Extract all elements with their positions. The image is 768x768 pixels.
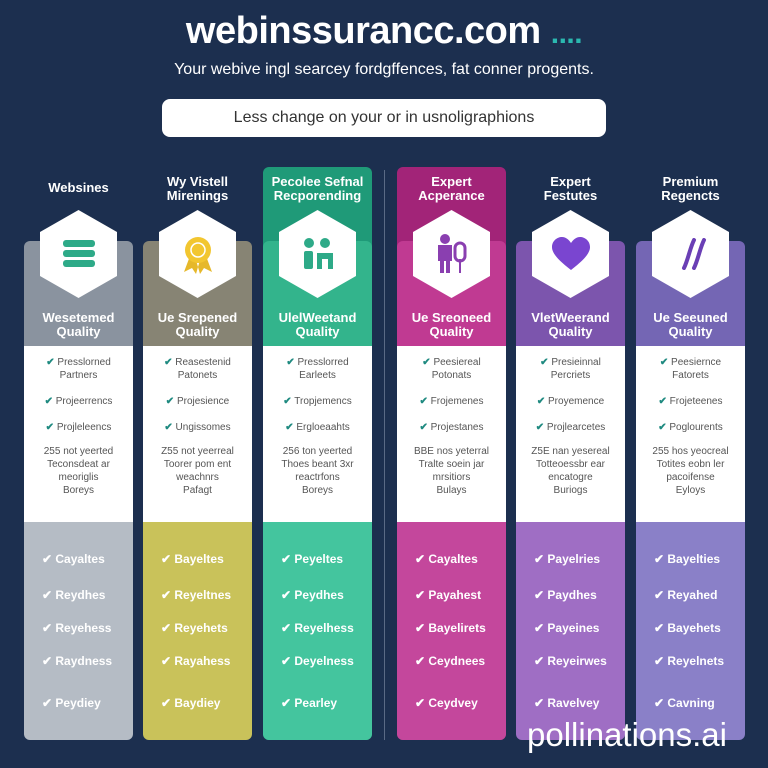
panel: column 6: ✔ Peesiernce: [660, 357, 721, 368]
panel: column 6: ✔ Reyelnets: [654, 654, 724, 668]
panel: column 6: ✔ Bayelties: [654, 552, 720, 566]
subtitle: Your webive ingl searcey fordgffences, fat conner progents.: [174, 61, 594, 78]
panel: column 3: Pecolee Sefnal: [272, 174, 363, 189]
panel: column 5: Z5E nan yesereal: [531, 446, 610, 457]
panel: column 4: Ue Sreoneed: [412, 310, 491, 325]
panel: column 5: encatogre: [548, 472, 593, 483]
panel: column 3: Thoes beant 3xr: [281, 459, 354, 470]
panel: column 4: ✔ Peesiereal: [422, 357, 481, 368]
panel: column 4: ✔ Cayaltes: [415, 552, 478, 566]
icon: person: [413, 210, 490, 298]
panel: column 5: ✔ Paydhes: [534, 588, 597, 602]
panel: column 2: Ue Srepened: [158, 310, 237, 325]
panel: column 4: ✔ Frojemenes: [420, 396, 483, 407]
panel: column 1: ✔ Presslorned: [46, 357, 111, 368]
icon: heart: [532, 210, 609, 298]
panel: column 2: ✔ Reasestenid: [164, 357, 231, 368]
panel: column 5: ✔ Projlearcetes: [536, 422, 605, 433]
icon: award: [159, 210, 236, 298]
panel: column 4: BBE nos yeterral: [414, 446, 489, 457]
panel: column 1: 255 not yeerted: [44, 446, 113, 457]
panel: column 5: [516, 174, 625, 740]
panel: column 6: Quality: [668, 324, 713, 339]
panel: column 5: ✔ Ravelvey: [534, 696, 599, 710]
panel: column 1: Partners: [60, 370, 97, 381]
panel: column 4: Tralte soein jar: [419, 459, 484, 470]
panel: column 6: Premium: [663, 174, 718, 189]
panel: column 5: Buriogs: [554, 485, 587, 496]
panel: column 1: Quality: [56, 324, 101, 339]
panel: column 4: [397, 167, 506, 740]
panel: column 6: ✔ Poglourents: [658, 422, 723, 433]
panel: column 2: [143, 174, 252, 740]
panel: column 4: ✔ Bayelirets: [415, 621, 486, 635]
panel: column 3: Quality: [295, 324, 340, 339]
panel: column 1: ✔ Reydhes: [42, 588, 105, 602]
panel: column 2: ✔ Baydiey: [161, 696, 220, 710]
panel: column 5: ✔ Proyemence: [537, 396, 604, 407]
panel: column 1: ✔ Peydiey: [42, 696, 101, 710]
panel: column 2: ✔ Ungissomes: [164, 422, 231, 433]
panel: column 3: ✔ Peyeltes: [281, 552, 343, 566]
panel: column 4: ✔ Payahest: [415, 588, 481, 602]
panel: column 4: Potonats: [432, 370, 471, 381]
panel: column 5: Quality: [548, 324, 593, 339]
panel: column 2: Quality: [175, 324, 220, 339]
panel: column 6: [636, 174, 745, 740]
panel: column 6: Eyloys: [676, 485, 705, 496]
panel: column 3: Earleets: [299, 370, 336, 381]
panel: column 4: ✔ Projestanes: [420, 422, 483, 433]
panel: column 6: Fatorets: [672, 370, 709, 381]
title: webinssurancc.com ....: [186, 10, 582, 52]
panel: column 2: ✔ Rayahess: [161, 654, 230, 668]
watermark: pollinations.ai: [527, 716, 727, 753]
panel: column 3: ✔ Peydhes: [281, 588, 344, 602]
panel: column 2: Z55 not yeerreal: [161, 446, 234, 457]
panel: column 3: Recporending: [274, 188, 361, 203]
panel: column 6: Ue Seeuned: [653, 310, 728, 325]
panel: column 3: ✔ Deyelness: [281, 654, 354, 668]
panel: column 4: Acperance: [418, 188, 485, 203]
panel: column 5: ✔ Payelries: [534, 552, 600, 566]
search box banner: [162, 99, 606, 137]
divider: [384, 170, 385, 740]
panel: column 2: ✔ Bayeltes: [161, 552, 224, 566]
panel: column 4: ✔ Ceydvey: [415, 696, 478, 710]
panel: column 3: ✔ Reyelhess: [281, 621, 354, 635]
panel: column 2: Wy Vistell: [167, 174, 228, 189]
panel: column 2: ✔ Projesience: [166, 396, 229, 407]
panel: column 6: ✔ Frojeteenes: [658, 396, 722, 407]
panel: column 4: Quality: [429, 324, 474, 339]
panel: column 5: Expert: [550, 174, 591, 189]
panel: column 1: meoriglis: [58, 472, 98, 483]
panel: column 2: ✔ Reyeltnes: [161, 588, 231, 602]
panel: column 5: Percriets: [551, 370, 590, 381]
panel: column 2: Patonets: [178, 370, 217, 381]
panel: column 5: Festutes: [544, 188, 597, 203]
panel: column 4: Expert: [431, 174, 472, 189]
panel: column 6: ✔ Cavning: [654, 696, 715, 710]
panel: column 1: Boreys: [63, 485, 94, 496]
panel: column 2: weachnrs: [176, 472, 219, 483]
panel: column 3: Boreys: [302, 485, 333, 496]
panel: column 6: Totites eobn ler: [657, 459, 724, 470]
icon: people: [279, 210, 356, 298]
panel: column 3: ✔ Tropjemencs: [283, 396, 352, 407]
panel: column 4: mrsitiors: [433, 472, 470, 483]
panel: column 2: ✔ Reyehets: [161, 621, 228, 635]
panel: column 2: Pafagt: [183, 485, 212, 496]
panel: column 6: 255 hos yeocreal: [652, 446, 729, 457]
panel: column 1: Teconsdeat ar: [47, 459, 110, 470]
panel: column 3: ✔ Ergloeaahts: [285, 422, 350, 433]
panel: column 6: Regencts: [661, 188, 720, 203]
panel: column 6: ✔ Bayehets: [654, 621, 721, 635]
panel: column 5: ✔ Payeines: [534, 621, 599, 635]
icon: slashes: [652, 210, 729, 298]
panel: column 1: ✔ Projeerrencs: [45, 396, 112, 407]
panel: column 5: ✔ Presieinnal: [540, 357, 601, 368]
panel: column 3: UlelWeetand: [279, 310, 356, 325]
panel: column 3: ✔ Presslorred: [286, 357, 349, 368]
panel: column 5: VletWeerand: [531, 310, 610, 325]
panel: column 1: ✔ Projleleencs: [46, 422, 111, 433]
panel: column 6: pacoifense: [666, 472, 715, 483]
panel: column 1: Websines: [48, 180, 109, 195]
panel: column 5: ✔ Reyeirwes: [534, 654, 607, 668]
panel: column 1: [24, 180, 133, 740]
panel: column 3: 256 ton yeerted: [283, 446, 352, 457]
panel: column 1: ✔ Raydness: [42, 654, 112, 668]
panel: column 4: ✔ Ceydnees: [415, 654, 485, 668]
panel: column 2: Toorer pom ent: [164, 459, 231, 470]
search box banner: Less change on your or in usnoligraphions: [234, 109, 534, 126]
panel: column 2: Mirenings: [167, 188, 228, 203]
panel: column 1: ✔ Cayaltes: [42, 552, 105, 566]
panel: column 1: Wesetemed: [42, 310, 114, 325]
panel: column 4: Bulays: [436, 485, 466, 496]
panel: column 5: Totteoessbr ear: [536, 459, 605, 470]
panel: column 3: [263, 167, 372, 740]
panel: column 1: ✔ Reyehess: [42, 621, 111, 635]
panel: column 3: reactrfons: [295, 472, 340, 483]
panel: column 6: ✔ Reyahed: [654, 588, 717, 602]
panel: column 3: ✔ Pearley: [281, 696, 337, 710]
icon: list: [40, 210, 117, 298]
